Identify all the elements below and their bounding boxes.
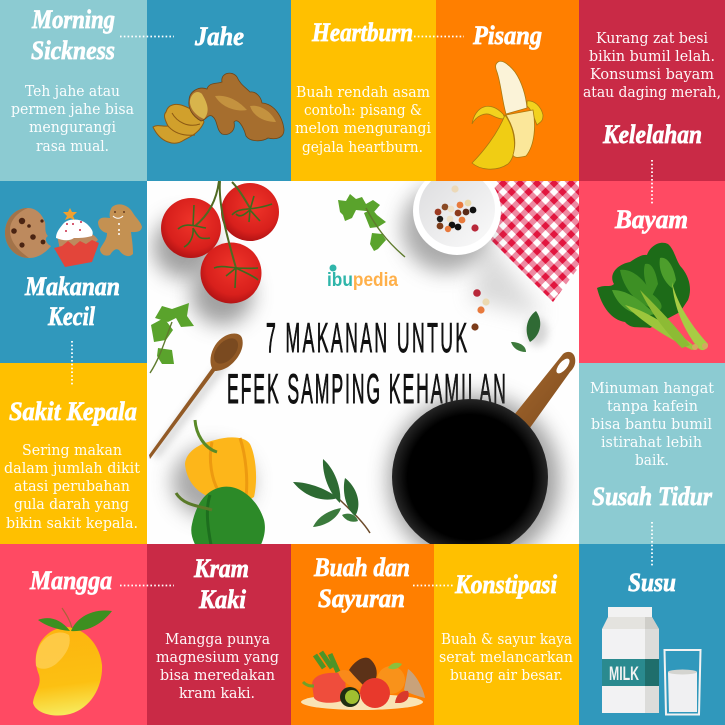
text block: magnesium yang xyxy=(156,648,279,666)
text block: bikin sakit kepala. xyxy=(6,514,138,532)
heading: Sakit Kepala xyxy=(9,397,137,426)
panel: Kelelahan xyxy=(579,0,725,181)
bowl of peppercorns xyxy=(402,167,501,272)
green bell pepper xyxy=(176,487,265,550)
text block: melon mengurangi xyxy=(295,119,431,137)
text block: permen jahe bisa xyxy=(11,100,134,118)
text block xyxy=(583,29,721,101)
icon: spinach xyxy=(597,243,708,350)
heading xyxy=(193,554,249,614)
text block: serat melancarkan xyxy=(439,648,573,666)
heading: Pisang xyxy=(472,21,542,50)
connector: Morning Sickness to Jahe xyxy=(120,36,174,38)
small green leaves xyxy=(511,311,548,352)
text block: kram kaki. xyxy=(179,684,255,702)
text block: atasi perubahan xyxy=(14,477,130,495)
panel: Mangga xyxy=(0,544,147,725)
text block: Teh jahe atau xyxy=(25,82,120,100)
heading xyxy=(31,5,115,65)
heading: Mangga xyxy=(29,566,112,595)
panel: Susu xyxy=(579,544,725,725)
panel: Morning Sickness xyxy=(0,0,147,181)
heading: Sickness xyxy=(31,36,115,65)
title: 7 MAKANAN UNTUK xyxy=(266,314,467,361)
text block: baik. xyxy=(635,451,669,469)
heading: Kram xyxy=(193,554,249,583)
connector: Heartburn to Pisang xyxy=(414,36,464,38)
heading: Makanan xyxy=(24,272,120,301)
tomatoes on the vine xyxy=(153,181,279,325)
heading xyxy=(24,272,120,331)
title: EFEK SAMPING KEHAMILAN xyxy=(227,365,506,412)
yellow bell pepper xyxy=(172,420,256,518)
text block: dalam jumlah dikit xyxy=(4,459,140,477)
heading: Susu xyxy=(628,568,676,597)
panel: Jahe xyxy=(147,0,291,181)
title xyxy=(228,322,505,404)
logo: ibupedia xyxy=(327,270,398,291)
icon: milk carton xyxy=(602,607,659,713)
panel: Susah Tidur xyxy=(579,363,725,544)
heading: Konstipasi xyxy=(454,570,558,599)
heading xyxy=(313,553,410,613)
icon: mango xyxy=(33,608,112,716)
heading: Bayam xyxy=(614,205,688,234)
connector: Susah Tidur to Susu xyxy=(651,522,653,566)
panel: Heartburn xyxy=(291,0,436,181)
icon: glass of milk xyxy=(664,650,700,714)
heading: Sayuran xyxy=(318,584,405,613)
text block: Kurang zat besi xyxy=(596,29,708,47)
checkered cloth xyxy=(470,181,579,318)
icon: ginger xyxy=(153,73,284,143)
panel: Sakit Kepala xyxy=(0,363,147,544)
text block: Buah rendah asam xyxy=(296,83,430,101)
icon: fruit and vegetable plate xyxy=(301,652,425,710)
connector: Kelelahan to Bayam xyxy=(651,160,653,204)
connector: Mangga to Kram Kaki xyxy=(120,584,174,586)
heading: Kelelahan xyxy=(602,120,702,149)
text block: bikin bumil lelah. xyxy=(589,47,715,65)
text block: istirahat lebih xyxy=(601,433,702,451)
panel: Kram Kaki xyxy=(147,544,291,725)
text block: gejala heartburn. xyxy=(302,138,423,156)
text block xyxy=(156,630,279,702)
text block: Mangga punya xyxy=(165,630,270,648)
text block: Konsumsi bayam xyxy=(590,65,714,83)
text block xyxy=(4,441,140,532)
icon: banana xyxy=(472,61,543,169)
connector: Buah dan Sayuran to Konstipasi xyxy=(413,584,453,586)
text block: gula darah yang xyxy=(14,495,129,513)
heading: Kaki xyxy=(198,585,247,614)
text block: tanpa kafein xyxy=(607,397,698,415)
text block: Sering makan xyxy=(22,441,122,459)
center panel: kitchen table scene xyxy=(148,167,579,566)
text block xyxy=(295,83,431,156)
heading: Jahe xyxy=(194,22,244,51)
text block: buang air besar. xyxy=(450,666,563,684)
parsley sprig left xyxy=(150,303,194,373)
text block: rasa mual. xyxy=(36,137,109,155)
heading: Buah dan xyxy=(313,553,410,582)
connector: Makanan Kecil to Sakit Kepala xyxy=(71,341,73,385)
panel: Makanan Kecil xyxy=(0,181,147,363)
heading: Morning xyxy=(31,5,115,34)
text block xyxy=(590,379,714,469)
icon: cookie, cupcake and gingerbread man xyxy=(5,204,142,267)
panel: Bayam xyxy=(579,181,725,363)
panel: Buah dan Sayuran xyxy=(291,544,434,725)
text block: Minuman hangat xyxy=(590,379,714,397)
text block: Buah & sayur kaya xyxy=(441,630,572,648)
scattered peppercorns xyxy=(471,289,490,331)
text block: contoh: pisang & xyxy=(304,101,422,119)
text block: bisa meredakan xyxy=(160,666,275,684)
icon: milk carton: MILK xyxy=(609,664,639,685)
bay leaf branch xyxy=(293,459,370,533)
text block: bisa bantu bumil xyxy=(591,415,712,433)
text block xyxy=(11,82,134,155)
text block: mengurangi xyxy=(29,118,116,136)
panel: Pisang xyxy=(436,0,579,181)
wooden spoon xyxy=(149,334,243,459)
heading: Heartburn xyxy=(311,18,413,47)
heading: Susah Tidur xyxy=(592,482,713,511)
frying pan xyxy=(388,352,575,566)
parsley sprig top xyxy=(338,194,405,257)
panel: Konstipasi xyxy=(434,544,579,725)
heading: Kecil xyxy=(47,302,96,331)
text block xyxy=(439,630,573,684)
